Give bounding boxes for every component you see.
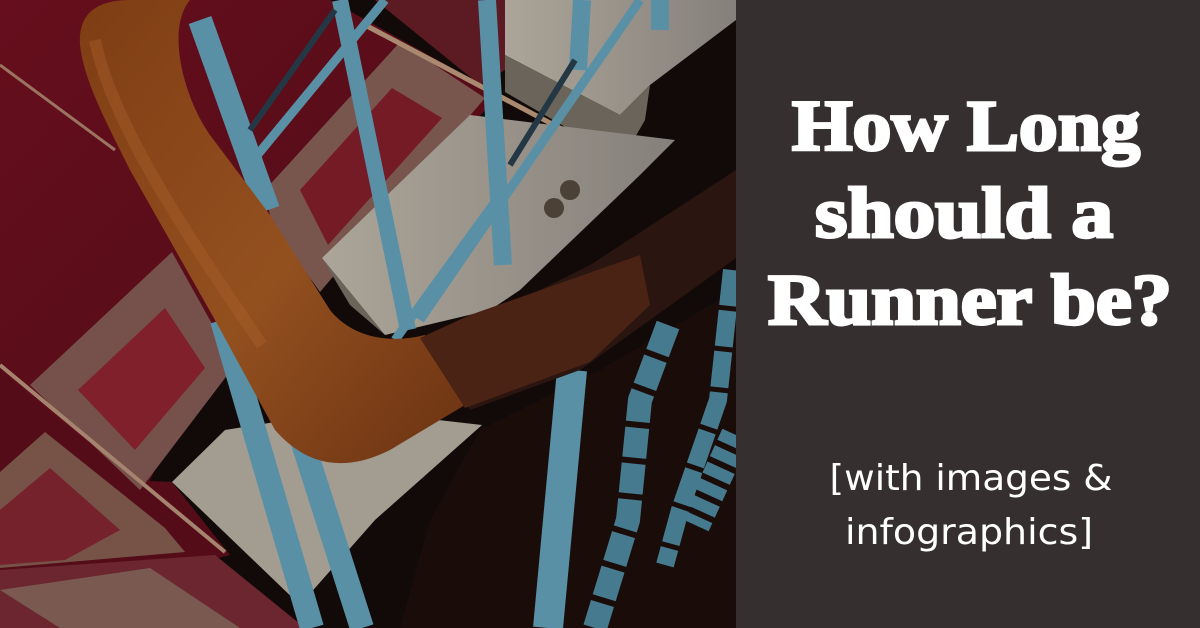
stone step: lower	[172, 410, 482, 605]
stair nosing lines	[0, 65, 115, 150]
subheading: [with images &	[830, 458, 1112, 499]
carpet bottom pattern	[0, 568, 240, 628]
ornate balusters	[595, 270, 736, 628]
heading: should a	[815, 173, 1113, 253]
carpet border: decorative band lower	[30, 252, 235, 490]
red runner: bottom	[0, 555, 305, 628]
subheading: infographics]	[845, 512, 1093, 553]
handrail: mid joint section	[420, 255, 650, 408]
red runner: lower step	[0, 370, 230, 570]
red runner: main carpet	[0, 0, 500, 500]
handrail: brown curved section	[80, 0, 465, 463]
carpet border: decorative band upper	[265, 42, 485, 292]
heading	[768, 86, 1172, 340]
stone step: top	[505, 0, 736, 115]
photo: staircase with red runner	[0, 0, 736, 628]
handrail: rivets	[560, 180, 580, 200]
balusters: blue iron	[200, 0, 660, 628]
lower stairs shadow tone	[400, 290, 736, 628]
subheading	[830, 458, 1112, 553]
heading: Runner be?	[768, 260, 1172, 340]
handrail: highlight	[95, 40, 262, 345]
balusters: dark iron	[250, 10, 575, 165]
dark stairwell background	[0, 0, 736, 628]
heading: How Long	[792, 86, 1140, 166]
carpet border: lower left pattern	[0, 432, 185, 568]
stone step: middle	[322, 115, 675, 335]
handrail: dark far section	[430, 170, 736, 410]
panel: dark title background	[736, 0, 1200, 628]
red runner: top right strip	[375, 0, 505, 85]
